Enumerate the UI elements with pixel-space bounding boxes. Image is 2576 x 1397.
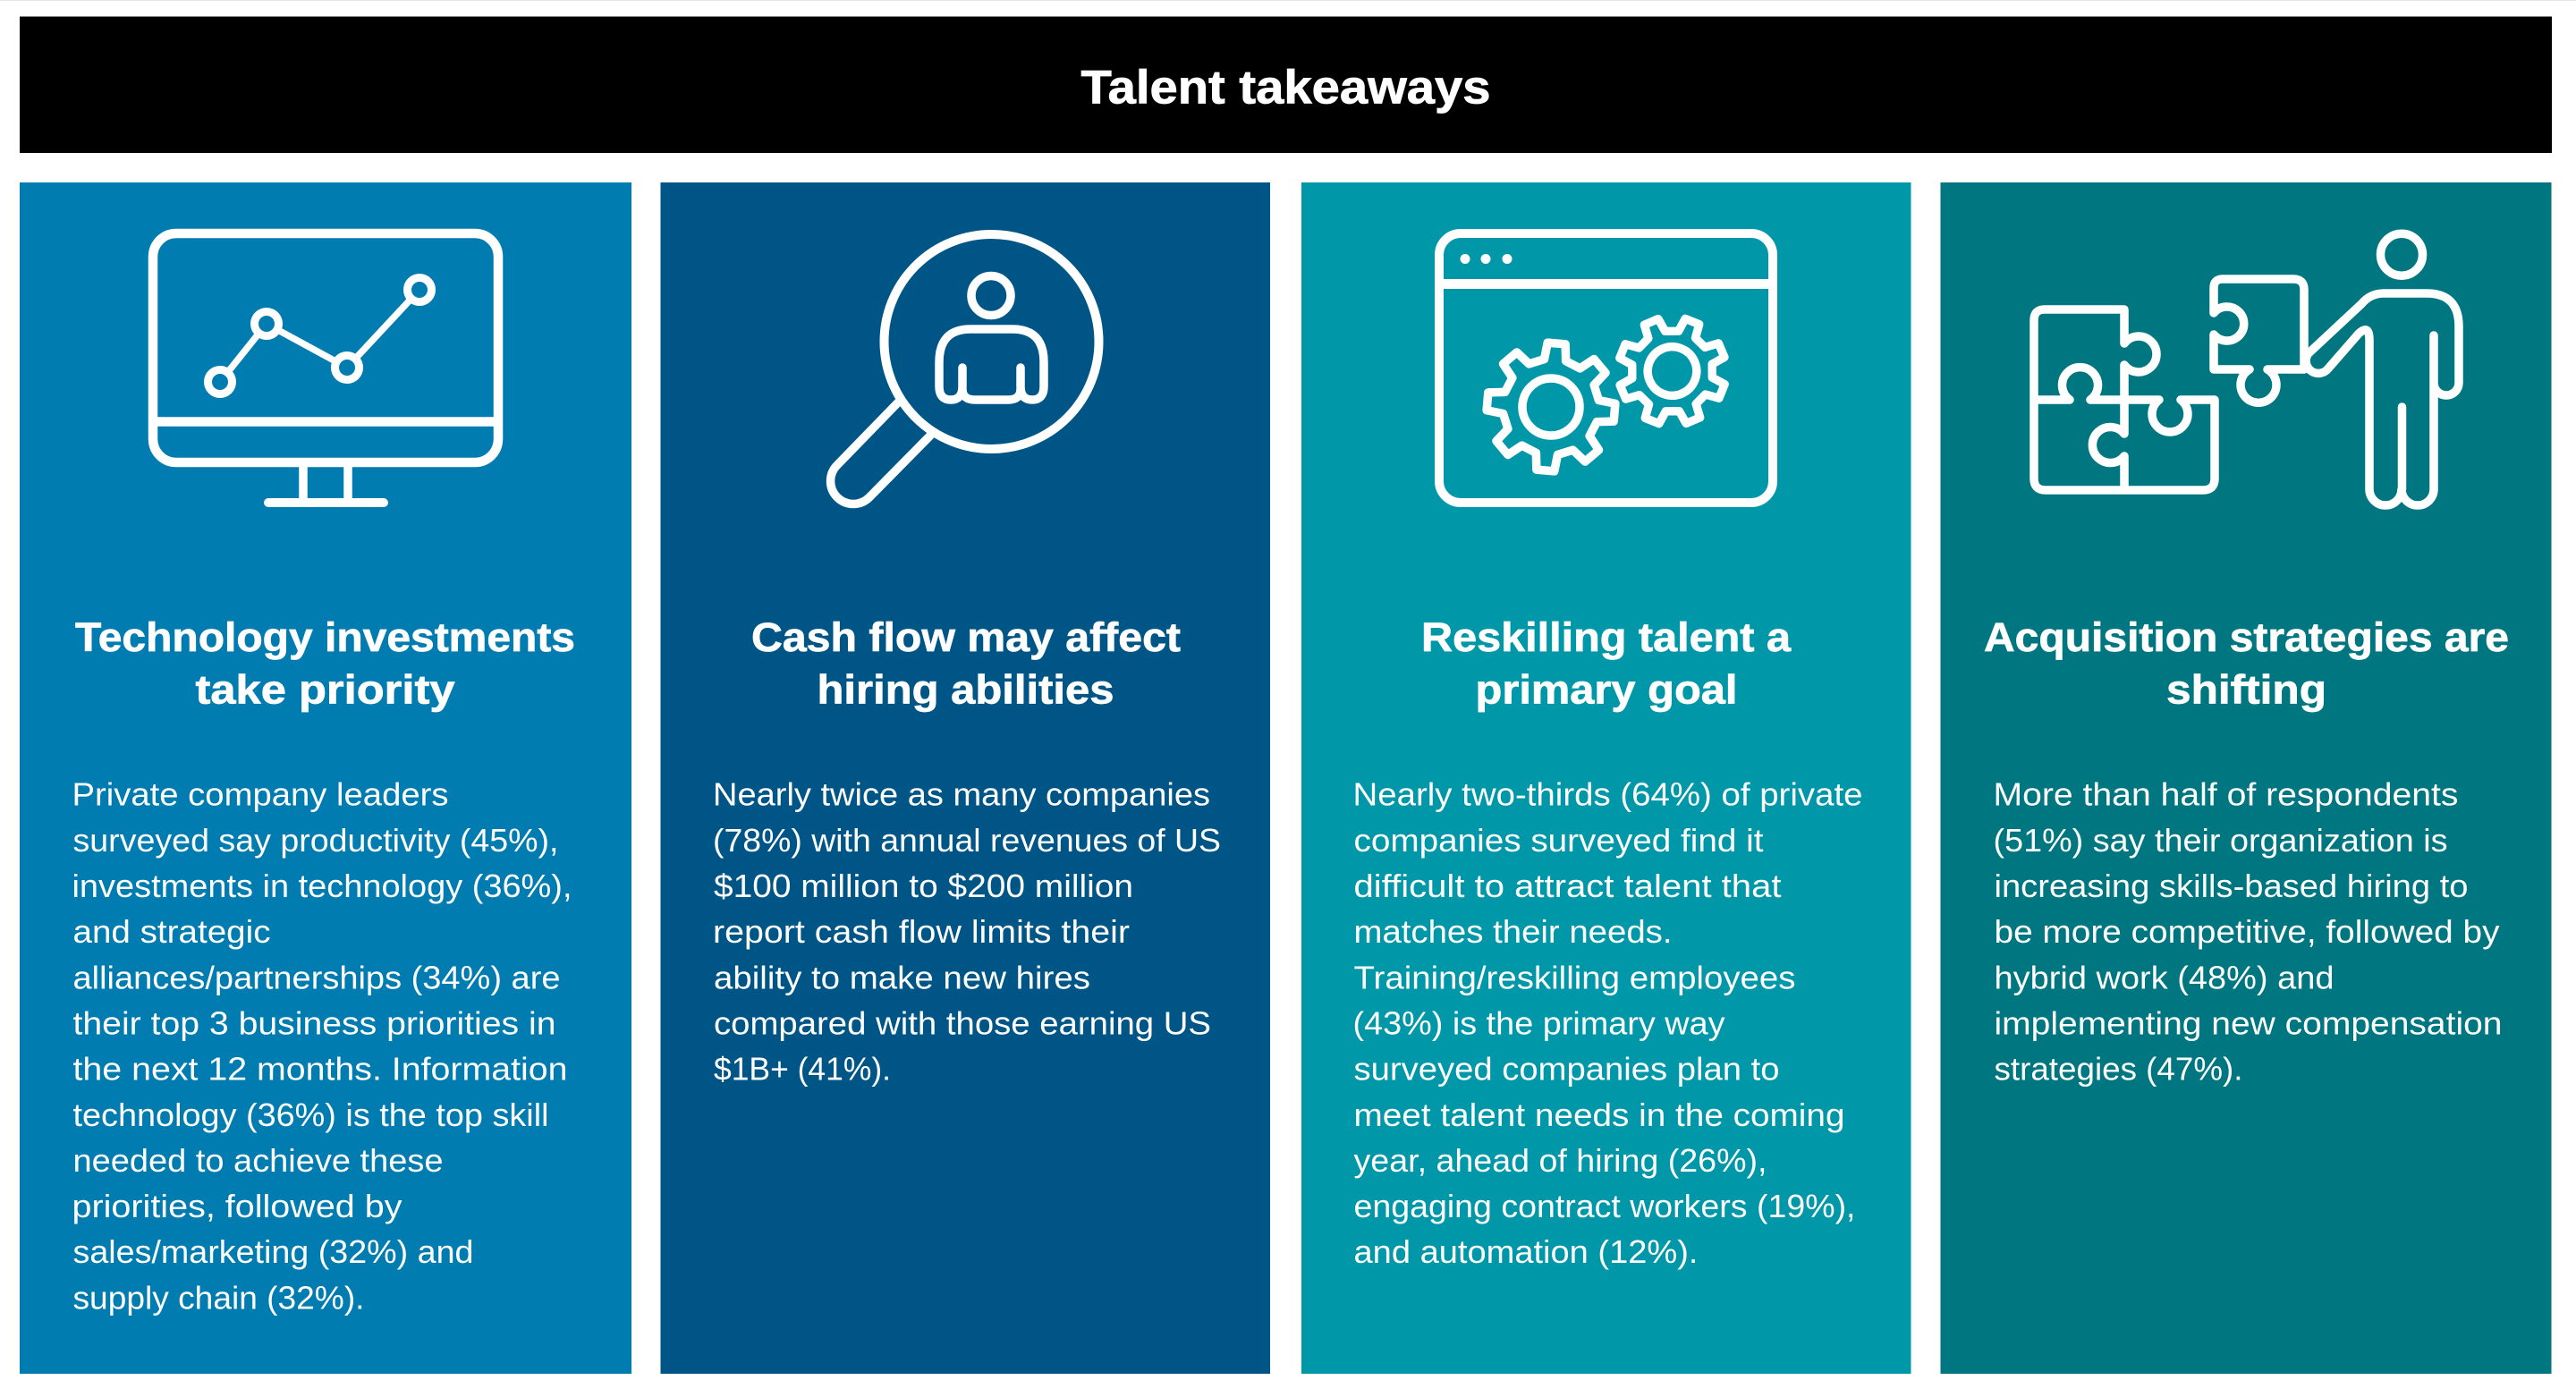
text block: reskilling talent body: engaging contract workers (19%), bbox=[1354, 1188, 1855, 1224]
text block: reskilling talent body: surveyed companies plan to bbox=[1354, 1051, 1780, 1088]
text block: technology investments body: alliances/partnerships (34%) are bbox=[73, 959, 560, 995]
text block: acquisition strategies body: More than half of respondents bbox=[1993, 776, 2458, 813]
panel: cash flow bbox=[660, 182, 1270, 1374]
text block: reskilling talent body: and automation (12%). bbox=[1354, 1233, 1698, 1270]
text block: technology investments body bbox=[72, 776, 572, 1316]
heading: reskilling talent: Reskilling talent a bbox=[1421, 614, 1792, 660]
text block: acquisition strategies body: hybrid work (48%) and bbox=[1995, 959, 2334, 995]
text block: reskilling talent body: companies surveyed find it bbox=[1354, 822, 1764, 859]
text block: acquisition strategies body bbox=[1993, 776, 2503, 1088]
text block: reskilling talent body: matches their needs. bbox=[1354, 913, 1673, 950]
icon: browser window with gears bbox=[1439, 233, 1773, 503]
heading: acquisition strategies: Acquisition strategies are bbox=[1984, 614, 2509, 660]
text block: technology investments body: and strategic bbox=[73, 913, 270, 950]
text block: technology investments body: investments in technology (36%), bbox=[72, 868, 572, 904]
panel: technology investments bbox=[20, 182, 631, 1374]
text block: technology investments body: sales/marketing (32%) and bbox=[73, 1233, 474, 1270]
text block: reskilling talent body: (43%) is the primary way bbox=[1352, 1005, 1725, 1042]
text block: cash flow body: Nearly twice as many companies bbox=[713, 776, 1210, 813]
text block: acquisition strategies body: implementing new compensation bbox=[1995, 1005, 2503, 1042]
text block: reskilling talent body: difficult to attract talent that bbox=[1354, 868, 1782, 904]
heading: cash flow bbox=[751, 614, 1181, 712]
text block: reskilling talent body: year, ahead of hiring (26%), bbox=[1354, 1142, 1767, 1179]
panel: acquisition strategies bbox=[1941, 182, 2551, 1374]
title: Talent takeaways bbox=[1080, 61, 1490, 114]
text block: cash flow body: ability to make new hires bbox=[714, 959, 1090, 995]
panel: reskilling talent bbox=[1301, 182, 1911, 1374]
heading: acquisition strategies: shifting bbox=[2166, 667, 2326, 712]
text block: acquisition strategies body: strategies (47%). bbox=[1995, 1051, 2243, 1088]
text block: cash flow body: $100 million to $200 million bbox=[714, 868, 1133, 904]
text block: acquisition strategies body: increasing skills-based hiring to bbox=[1995, 868, 2469, 904]
icon: monitor with line chart bbox=[153, 233, 498, 503]
heading: technology investments: Technology investments bbox=[75, 614, 575, 660]
heading: acquisition strategies bbox=[1984, 614, 2509, 712]
icon: person placing puzzle piece bbox=[2034, 233, 2459, 505]
text block: technology investments body: the next 12 months. Information bbox=[73, 1051, 567, 1088]
text block: reskilling talent body bbox=[1352, 776, 1862, 1270]
text block: technology investments body: their top 3 business priorities in bbox=[73, 1005, 556, 1042]
text block: acquisition strategies body: (51%) say their organization is bbox=[1993, 822, 2447, 859]
text block: reskilling talent body: Nearly two-thirds (64%) of private bbox=[1352, 776, 1862, 813]
heading: cash flow: hiring abilities bbox=[818, 667, 1114, 712]
text block: technology investments body: technology (36%) is the top skill bbox=[73, 1096, 549, 1133]
text block: technology investments body: supply chain (32%). bbox=[73, 1279, 365, 1316]
text block: cash flow body: compared with those earning US bbox=[714, 1005, 1211, 1042]
heading: technology investments: take priority bbox=[195, 667, 454, 712]
heading: reskilling talent bbox=[1421, 614, 1792, 712]
text block: acquisition strategies body: be more competitive, followed by bbox=[1995, 913, 2500, 950]
text block: cash flow body: (78%) with annual revenues of US bbox=[713, 822, 1221, 859]
text block: cash flow body: report cash flow limits their bbox=[713, 913, 1130, 950]
text block: technology investments body: priorities, followed by bbox=[72, 1188, 402, 1224]
text block: cash flow body: $1B+ (41%). bbox=[714, 1051, 891, 1088]
text block: technology investments body: Private company leaders bbox=[72, 776, 449, 813]
text block: technology investments body: surveyed say productivity (45%), bbox=[73, 822, 558, 859]
heading: cash flow: Cash flow may affect bbox=[751, 614, 1181, 660]
text block: reskilling talent body: Training/reskilling employees bbox=[1354, 959, 1796, 995]
heading: technology investments bbox=[75, 614, 575, 712]
heading: reskilling talent: primary goal bbox=[1476, 667, 1737, 712]
text block: technology investments body: needed to achieve these bbox=[73, 1142, 444, 1179]
icon: magnifying glass over person bbox=[831, 234, 1098, 504]
title banner bbox=[20, 16, 2552, 153]
text block: reskilling talent body: meet talent needs in the coming bbox=[1354, 1096, 1844, 1133]
text block: cash flow body bbox=[713, 776, 1221, 1088]
